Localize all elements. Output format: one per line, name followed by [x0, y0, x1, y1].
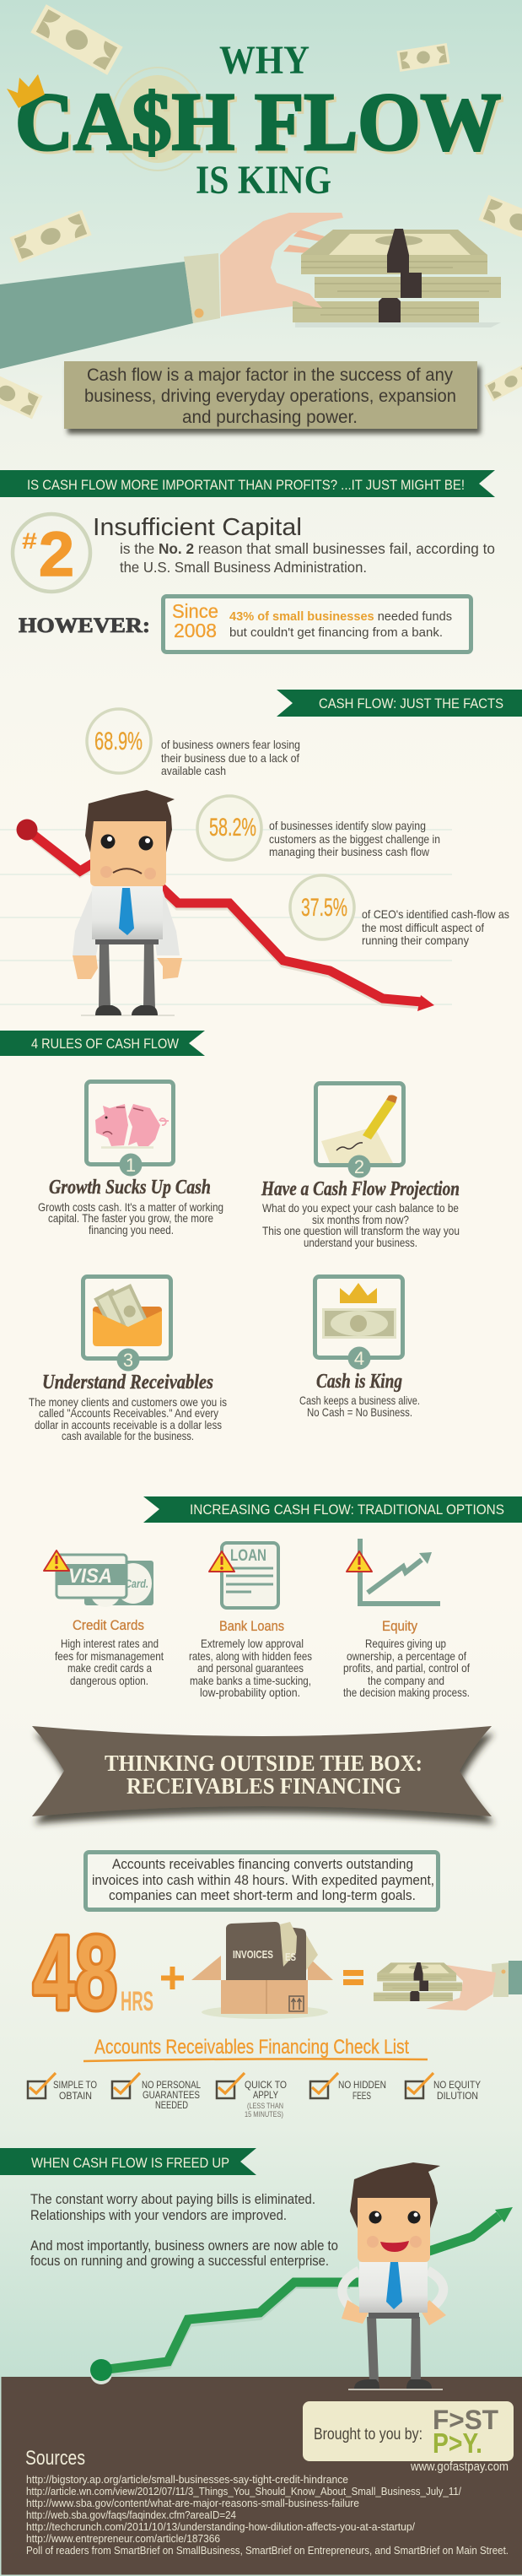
stat: 58.2%: customers as the biggest challenge in: [269, 832, 440, 846]
text: low-probability option.: [200, 1686, 300, 1699]
text: [189, 1637, 312, 1699]
text: Cash keeps a business alive.: [299, 1394, 420, 1407]
ribbon: thinking outside the box: THINKING OUTSIDE THE BOX:: [105, 1751, 422, 1776]
hero: floating dollar bills: [0, 4, 522, 419]
illustration: arm reaching for money stacks: [0, 213, 501, 369]
icon: box of invoices: [191, 1922, 333, 2019]
text: the decision making process.: [343, 1686, 470, 1699]
text: What do you expect your cash balance to be: [262, 1201, 459, 1215]
icon: hand holding cash: [374, 1961, 522, 2010]
chart: rising green line: [90, 2207, 513, 2384]
item: no hidden fees: [310, 2073, 386, 2102]
text: make banks a time-sucking,: [190, 1674, 311, 1687]
title: CA$H FLOW: [18, 79, 503, 170]
rule 3: understand receivables: [29, 1276, 227, 1442]
banner: is cash flow more important than profits: [0, 470, 495, 497]
icon: loan document: LOAN: [230, 1547, 266, 1565]
item: simple to obtain: SIMPLE TO: [53, 2079, 97, 2091]
sources: http://article.wn.com/view/2012/07/11/3_Things_You_Should_Know_About_Small_Business_July_11/: [26, 2485, 461, 2498]
option: credit cards: [44, 1550, 164, 1687]
heading: check list: Accounts Receivables Financing Check List: [94, 2036, 409, 2059]
callout: since 2008: 2008: [174, 620, 217, 641]
callout: since 2008: but couldn't get financing from a bank.: [229, 625, 443, 640]
stat: 37.5%: the most difficult aspect of: [362, 921, 484, 934]
text: profits, and partial, control of: [343, 1661, 470, 1675]
option: equity: [343, 1539, 470, 1699]
item: no equity dilution: [406, 2073, 481, 2102]
text: benefits of freed cash flow: The constant worry about paying bills is eliminated.: [30, 2192, 315, 2207]
callout: receivables financing definition: companies can meet short-term and long-term goals.: [109, 1888, 416, 1903]
text: capital. The faster you grow, the more: [48, 1211, 213, 1225]
icon: box of invoices: ES: [285, 1951, 296, 1963]
heading: Credit Cards: [73, 1617, 144, 1633]
sources: http://techcrunch.com/2011/10/13/understanding-how-dilution-affects-you-at-a-startup/: [26, 2520, 415, 2533]
heading: however: HOWEVER:: [19, 614, 150, 637]
heading: Have a Cash Flow Projection: [261, 1178, 460, 1200]
text: financing you need.: [89, 1223, 174, 1237]
stat: 68.9%: 68.9%: [94, 728, 143, 755]
icon: broken piggy bank: [86, 1082, 174, 1177]
stat: 68.9%: [87, 709, 300, 777]
item: no personal guarantees: [112, 2073, 201, 2111]
text: [299, 1394, 420, 1419]
banner: just the facts: [277, 690, 522, 717]
callout: since 2008: [164, 596, 471, 652]
icon: crown: [7, 74, 45, 108]
illustration: worried businessman: [73, 790, 182, 1015]
sources: http://web.sba.gov/faqs/faqindex.cfm?areaID=24: [26, 2508, 236, 2521]
text: Requires giving up: [365, 1637, 446, 1650]
text: ownership, a percentage of: [347, 1649, 466, 1663]
icon: broken piggy bank: 1: [126, 1155, 136, 1176]
icon: crown over bill: 4: [354, 1348, 364, 1369]
text: cash available for the business.: [62, 1429, 194, 1442]
item: quick to apply: (LESS THAN: [247, 2102, 283, 2110]
text: the company and: [368, 1674, 444, 1687]
stat: 68.9%: of business owners fear losing: [161, 738, 300, 751]
text: benefits of freed cash flow: Relationships with your vendors are improved.: [30, 2208, 287, 2223]
ribbon: thinking outside the box: [32, 1726, 492, 1816]
stat: 58.2%: 58.2%: [209, 814, 256, 842]
title: [15, 38, 503, 203]
icon: number two badge: 2: [39, 519, 74, 589]
stat: 58.2%: managing their business cash flow: [269, 845, 430, 858]
rule 4: cash is king: [299, 1276, 420, 1419]
rule 2: cash flow projection: [261, 1084, 460, 1249]
stat: 58.2%: [197, 796, 440, 860]
ribbon: thinking outside the box: RECEIVABLES FINANCING: [126, 1773, 401, 1799]
text: High interest rates and: [61, 1637, 159, 1650]
icon: credit cards: Card.: [125, 1577, 148, 1590]
item: no hidden fees: FEES: [352, 2090, 371, 2102]
text: benefits of freed cash flow: [30, 2192, 338, 2269]
callout: receivables financing definition: Accounts receivables financing converts outstanding: [112, 1857, 413, 1872]
icon: box of invoices: INVOICES: [233, 1948, 273, 1961]
icon: envelope with bills: 3: [123, 1350, 133, 1371]
item: no hidden fees: NO HIDDEN: [338, 2079, 386, 2091]
text: Growth costs cash. It's a matter of working: [38, 1200, 223, 1214]
icon: paper and pencil: 2: [354, 1156, 364, 1177]
text: No Cash = No Business.: [307, 1405, 412, 1419]
intro callout: Cash flow is a major factor in the success of any: [87, 365, 453, 385]
callout: since 2008: 43% of small businesses needed funds: [229, 609, 452, 624]
chart: falling red line: [0, 819, 452, 1011]
text: failure reason: [120, 540, 495, 576]
equation: 48 hours plus invoices equals cash: [33, 1915, 522, 2032]
icon: plus: [161, 1967, 184, 1989]
text: benefits of freed cash flow: And most importantly, business owners are now able to: [30, 2238, 338, 2254]
sources: http://www.entrepreneur.com/article/187366: [26, 2532, 220, 2545]
stat: 37.5%: running their company: [362, 934, 469, 947]
text: dangerous option.: [70, 1674, 148, 1687]
banner: when cash flow is freed up: WHEN CASH FLOW IS FREED UP: [31, 2155, 229, 2171]
item: no personal guarantees: GUARANTEES: [143, 2089, 200, 2101]
icon: number two badge: [13, 514, 90, 592]
text: dollar in accounts receivable is a dollar less: [35, 1418, 222, 1431]
website url: www.gofastpay.com: [410, 2460, 509, 2474]
sources: http://www.sba.gov/content/what-are-major-reasons-small-business-failure: [26, 2497, 359, 2509]
heading: Understand Receivables: [42, 1372, 213, 1394]
text: called "Accounts Receivables." And every: [39, 1406, 218, 1420]
stat: 58.2%: of businesses identify slow paying: [269, 819, 426, 832]
text: Extremely low approval: [201, 1637, 304, 1650]
title: IS KING: [196, 158, 331, 203]
illustration: happy businessman: [342, 2162, 446, 2389]
intro callout: business, driving everyday operations, expansion: [84, 387, 456, 406]
icon: number two badge: #: [22, 528, 37, 554]
text: This one question will transform the way you: [262, 1224, 460, 1237]
text: [343, 1637, 470, 1699]
banner: is cash flow more important than profits: IS CASH FLOW MORE IMPORTANT THAN PROFITS? ...IT JUST MIGHT BE!: [27, 477, 465, 493]
intro callout: and purchasing power.: [182, 408, 358, 427]
intro callout: [64, 361, 477, 429]
icon: envelope with bills: [83, 1276, 170, 1371]
item: no personal guarantees: NEEDED: [155, 2099, 188, 2111]
heading: Bank Loans: [219, 1618, 284, 1634]
checklist: [28, 2036, 481, 2119]
text: benefits of freed cash flow: focus on running and growing a successful enterprise.: [30, 2254, 329, 2269]
icon: credit cards: [44, 1550, 153, 1607]
text: [55, 1637, 164, 1687]
text: failure reason: the U.S. Small Business Administration.: [120, 559, 367, 576]
heading: Growth Sucks Up Cash: [49, 1177, 211, 1199]
stat: 68.9%: available cash: [161, 764, 226, 777]
text: failure reason: is the No. 2 reason that small businesses fail, according to: [120, 540, 495, 557]
figure: 48 hrs: HRS: [121, 1986, 153, 2016]
stat: 37.5%: 37.5%: [301, 894, 347, 922]
item: quick to apply: QUICK TO: [245, 2079, 287, 2091]
heading: insufficient capital: Insufficient Capital: [93, 514, 302, 541]
sources: Sources: [25, 2447, 85, 2470]
stat: #2 insufficient capital: [13, 514, 495, 592]
text: make credit cards a: [67, 1661, 152, 1675]
banner: 4 rules of cash flow: [0, 1031, 205, 1056]
banner: when cash flow is freed up: [0, 2148, 256, 2175]
sponsor card: fast pay: F>ST: [433, 2405, 498, 2435]
text: [29, 1395, 227, 1442]
rule 1: growth sucks up cash: [38, 1082, 223, 1237]
icon: equals: [343, 1970, 363, 1985]
item: simple to obtain: OBTAIN: [59, 2090, 92, 2102]
stat: 37.5%: [290, 875, 509, 947]
text: The money clients and customers owe you is: [29, 1395, 227, 1409]
item: no personal guarantees: NO PERSONAL: [142, 2079, 201, 2091]
heading: Cash is King: [316, 1371, 402, 1393]
text: understand your business.: [304, 1236, 417, 1249]
title: CA$H FLOW: [15, 77, 501, 168]
heading: Equity: [382, 1618, 417, 1634]
callout: receivables financing definition: invoices into cash within 48 hours. With expedited payment,: [92, 1873, 434, 1888]
footer background: [2, 2377, 522, 2574]
icon: credit cards: VISA: [68, 1565, 112, 1588]
icon: loan document: [209, 1543, 278, 1608]
text: [38, 1200, 223, 1237]
sources: [25, 2447, 509, 2557]
banner: traditional options: [143, 1496, 522, 1523]
callout: receivables financing definition: [86, 1852, 439, 1909]
item: no equity dilution: NO EQUITY: [433, 2079, 481, 2091]
text: fees for mismanagement: [55, 1649, 164, 1663]
text: [262, 1201, 460, 1249]
sponsor card: fast pay: P>Y.: [433, 2427, 482, 2459]
title: WHY: [219, 38, 309, 83]
sources: http://bigstory.ap.org/article/small-businesses-say-tight-credit-hindrance: [26, 2473, 348, 2486]
item: quick to apply: 15 MINUTES): [245, 2110, 283, 2119]
text: rates, along with hidden fees: [189, 1649, 312, 1663]
option: bank loans: [189, 1543, 312, 1699]
banner: 4 rules of cash flow: 4 RULES OF CASH FLOW: [31, 1036, 179, 1052]
stat: 68.9%: their business due to a lack of: [161, 751, 299, 765]
text: six months from now?: [312, 1213, 409, 1226]
item: no equity dilution: DILUTION: [437, 2090, 478, 2102]
figure: 48 hrs: 48: [33, 1915, 117, 2032]
item: simple to obtain: [28, 2073, 97, 2102]
sponsor card: fast pay: [303, 2401, 514, 2461]
text: and personal guarantees: [197, 1661, 304, 1675]
sponsor card: fast pay: Brought to you by:: [314, 2426, 422, 2443]
icon: crown over bill: [315, 1276, 403, 1369]
icon: paper and pencil: [315, 1084, 403, 1178]
callout: since 2008: Since: [172, 600, 218, 622]
icon: coin behind title: [111, 68, 204, 170]
icon: rising equity chart: [347, 1539, 440, 1604]
item: quick to apply: [217, 2073, 287, 2119]
item: quick to apply: APPLY: [253, 2089, 278, 2101]
